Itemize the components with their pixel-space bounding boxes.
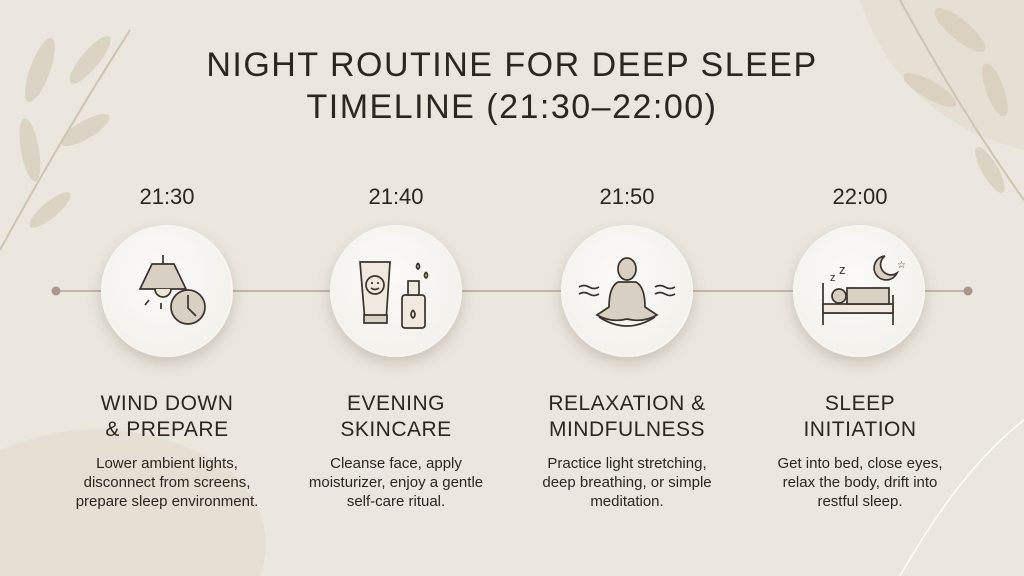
text: INITIATION bbox=[803, 418, 917, 441]
text: SKINCARE bbox=[340, 418, 452, 441]
text: SLEEP bbox=[825, 392, 895, 415]
circle: bed bbox=[793, 225, 925, 357]
title: TIMELINE (21:30–22:00) bbox=[307, 88, 717, 126]
step 4 text bbox=[777, 392, 943, 510]
circle: lamp & clock bbox=[101, 225, 233, 357]
times: 21:30 bbox=[139, 184, 195, 209]
circle: skincare bbox=[330, 225, 462, 357]
step 1 text bbox=[76, 392, 258, 510]
text: 22:00 bbox=[832, 184, 888, 209]
text: Get into bed, close eyes, relax the body, drift into restful sleep. bbox=[777, 455, 943, 510]
text: 21:40 bbox=[368, 184, 424, 209]
circle: bed: z bbox=[830, 272, 836, 284]
timeline line bbox=[52, 286, 972, 296]
step 2 text bbox=[309, 392, 483, 510]
step 3 text bbox=[542, 392, 712, 510]
text: Practice light stretching, deep breathing, or simple meditation. bbox=[542, 455, 712, 510]
text: RELAXATION & bbox=[548, 392, 706, 415]
text: 21:50 bbox=[599, 184, 655, 209]
text: Cleanse face, apply moisturizer, enjoy a gentle self-care ritual. bbox=[309, 455, 483, 510]
circle: meditation bbox=[561, 225, 693, 357]
text: WIND DOWN bbox=[101, 392, 233, 415]
title bbox=[206, 46, 818, 126]
title: NIGHT ROUTINE FOR DEEP SLEEP bbox=[206, 46, 818, 84]
text: & PREPARE bbox=[105, 418, 229, 441]
text: Lower ambient lights, disconnect from screens, prepare sleep environment. bbox=[76, 455, 258, 510]
circle: bed: z bbox=[839, 262, 846, 277]
circle: bed: ☆ bbox=[897, 260, 906, 271]
text: MINDFULNESS bbox=[549, 418, 705, 441]
text: EVENING bbox=[347, 392, 445, 415]
